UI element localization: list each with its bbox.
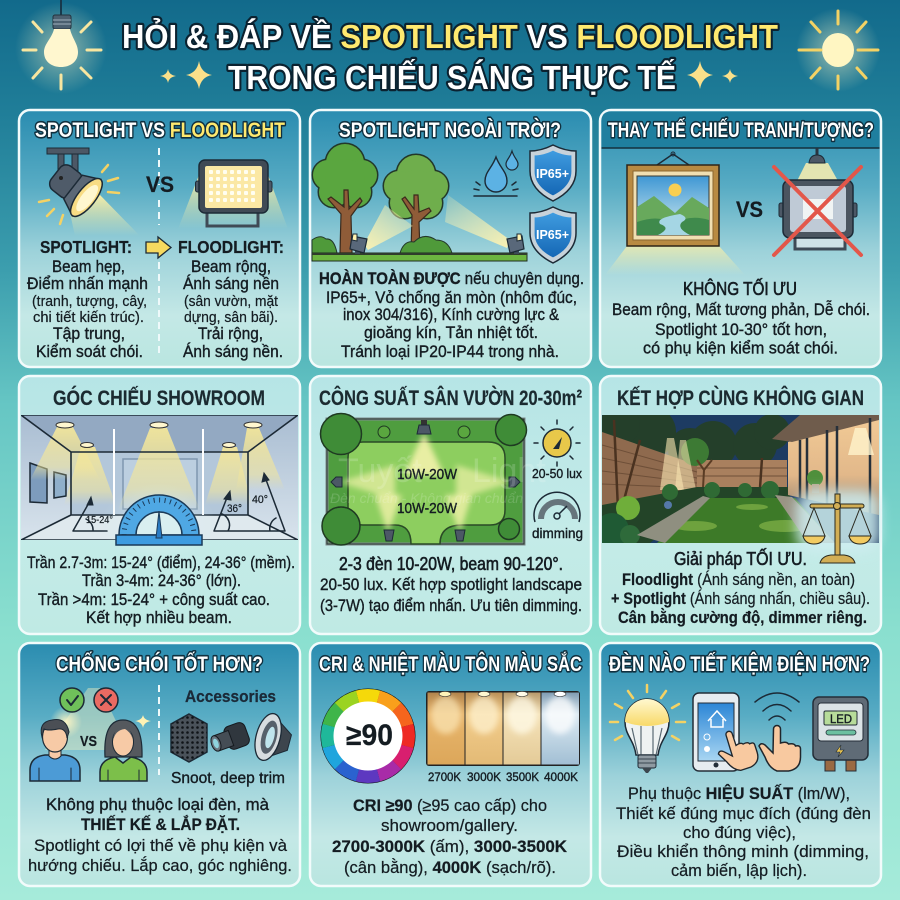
illustration: people and glare: VS [80,733,97,750]
icon: dimming gauge [532,492,583,541]
panel: spotlight vs floodlight [19,110,300,367]
spotlight text: SPOTLIGHT: [40,237,132,257]
icon: electric meter [813,697,868,771]
body text: Giải pháp TỐI ƯU. [674,548,807,569]
icon: shield bottom: IP65+ [536,227,569,242]
body text: Spotlight có lợi thế về phụ kiện và [34,837,288,855]
icon: framed picture [605,152,745,275]
panel: energy saving [600,643,881,886]
panel: garden wattage [310,376,591,634]
illustration: garden plan [320,414,526,545]
panel: outdoor spotlight [310,110,591,367]
body text: THIẾT KẾ & LẮP ĐẶT. [81,815,240,834]
watermark: Light [472,452,546,490]
heading: SPOTLIGHT NGOÀI TRỜI? [339,118,561,142]
header [15,0,880,96]
watermark [330,452,546,506]
floodlight text: Beam rộng, [191,258,271,276]
body text [319,269,584,361]
body text: (cân bằng), 4000K (sạch/rõ). [344,858,556,877]
vs label: VS [146,172,174,197]
floodlight text: dựng, sân bãi). [184,309,278,326]
floodlight text [178,237,284,361]
panel: replace for art lighting [600,110,881,367]
spotlight text: Kiểm soát chói. [36,343,143,361]
illustration: garden plan: 10W-20W [397,500,458,517]
body text: Floodlight (Ánh sáng nền, an toàn) [622,570,855,589]
angle arrows: 15-24° [86,514,113,526]
body text [28,796,292,875]
spotlight text: Beam hẹp, [52,258,125,276]
vs label: VS [736,197,763,222]
illustration: trees and ground lights [312,144,527,261]
heading: CHỐNG CHÓI TỐT HƠN? [56,652,263,676]
body text: + Spotlight (Ánh sáng nhấn, chiều sâu). [611,589,870,608]
icon: LED bulb [610,685,685,773]
panel: anti glare [19,643,300,886]
body text: Phụ thuộc HIỆU SUẤT (lm/W), [628,784,850,803]
angle arrows: 36° [227,503,242,515]
title line 1: HỎI & ĐÁP VỀ SPOTLIGHT VS FLOODLIGHT [122,18,778,55]
angle arrows [73,473,285,531]
chart: colour temperature swatches: 4000K [544,770,578,784]
body text: Thiết kế đúng mục đích (đúng đèn [616,805,871,823]
chart: colour wheel [311,679,425,793]
accessories: Snoot, deep trim [171,770,285,787]
body text: 2700-3000K (ấm), 3000-3500K [332,838,567,856]
spotlight text: chi tiết kiến trúc). [33,309,144,326]
heading: GÓC CHIẾU SHOWROOM [53,385,265,410]
floodlight text: FLOODLIGHT: [178,237,284,257]
floodlight text: Ánh sáng nền. [183,342,283,361]
body text [320,554,582,615]
panel: combine in one space [595,376,881,634]
icon: dimming gauge: dimming [532,526,583,541]
floodlight text: (sân vườn, mặt [184,293,279,310]
floodlight text: Ánh sáng nền [183,274,279,293]
body text: Không phụ thuộc loại đèn, mà [46,796,270,814]
body text: Điều khiển thông minh (dimming, [617,843,869,861]
body text: Trần >4m: 15-24° + công suất cao. [38,591,270,609]
spotlight text: Tập trung, [53,325,125,343]
body text: cho đúng việc), [683,824,796,842]
icon: honeycomb [171,714,207,762]
body text: cảm biến, lập lịch). [671,862,807,880]
icon: reflector [250,711,296,766]
chart: colour temperature swatches [426,691,580,784]
illustration: showroom [21,415,298,540]
body text: KHÔNG TỐI ƯU [683,278,797,299]
arrow [146,237,171,258]
panel: CRI and colour temperature [310,643,591,886]
body text: (3-7W) tạo điểm nhấn. Ưu tiên dimming. [320,597,582,615]
illustration: garden plan: 10W-20W [397,466,458,483]
body text: gioăng kín, Tản nhiệt tốt. [364,324,538,342]
body text: Cân bằng cường độ, dimmer riêng. [618,608,867,627]
icon: shield top: IP65+ [536,166,569,181]
heading: CRI & NHIỆT MÀU TÔN MÀU SẮC [319,652,582,676]
body text: Kết hợp nhiều beam. [86,609,232,627]
spotlight text: Điểm nhấn mạnh [27,275,148,293]
icon: lux meter [532,420,582,481]
body text [612,278,870,358]
icon: spotlight fixture [39,148,140,236]
divider [158,148,160,355]
body text: Spotlight 10-30° tốt hơn, [655,321,827,339]
body text: 2-3 đèn 10-20W, beam 90-120°. [339,554,563,574]
title line 2: TRONG CHIẾU SÁNG THỰC TẾ [228,59,676,96]
body text: IP65+, Vỏ chống ăn mòn (nhôm đúc, [326,289,577,307]
body text: 20-50 lux. Kết hợp spotlight landscape [320,576,582,594]
body text [616,784,871,880]
floodlight text: Trải rộng, [198,325,263,343]
body text: có phụ kiện kiểm soát chói. [643,340,838,358]
heading band [602,112,880,148]
heading: CÔNG SUẤT SÂN VƯỜN 20-30m² [319,385,582,410]
icon: shield top [530,145,576,201]
accessories [171,687,296,787]
icon: crossed floodlight [774,148,861,255]
body text [27,554,295,627]
body text: inox 304/316), Kính cường lực & [343,306,559,324]
body text: Tránh loại IP20-IP44 trong nhà. [341,343,559,361]
watermark: Đèn chuẩn - Không gian chuẩn [330,490,523,506]
spotlight text [27,237,148,361]
body text: HOÀN TOÀN ĐƯỢC nếu chuyên dụng. [319,269,584,288]
divider [158,685,160,775]
panel: showroom beam angle [19,376,300,634]
illustration: people and glare [30,688,151,781]
body text: Trần 3-4m: 24-36° (lớn). [82,572,241,590]
icon: shield bottom [530,207,576,263]
icon: protractor [101,483,217,567]
body text: showroom/gallery. [381,817,518,835]
chart: colour temperature swatches: 3500K [506,770,539,784]
heading: SPOTLIGHT VS FLOODLIGHT [35,119,285,142]
icon: bulb left [15,0,107,94]
illustration: garden house at night [602,415,879,543]
body text: Trần 2.7-3m: 15-24° (điểm), 24-36° (mềm). [27,554,295,572]
icon: electric meter: LED [830,714,852,726]
body text: CRI ≥90 (≥95 cao cấp) cho [353,797,547,815]
body text: hướng chiếu. Lắp cao, góc nghiêng. [28,856,292,875]
chart: colour temperature swatches: 2700K [428,770,461,784]
body text [611,548,870,627]
spotlight text: (tranh, tượng, cây, [32,293,147,310]
icon: floodlight [178,160,288,229]
chart: colour wheel: ≥90 [346,719,393,752]
accessories: Accessories [185,687,276,706]
icon: water drops [474,151,518,196]
icon: lux meter: 20-50 lux [532,466,582,481]
watermark: Tuyết [338,452,422,490]
icon: balance scale [796,490,880,563]
body text [332,797,567,877]
angle arrows: 40° [252,494,268,506]
sparkles [160,61,738,89]
icon: touch and wifi [755,693,800,771]
icon: snoot [208,721,251,756]
icon: smartphone [693,693,761,775]
body text: Beam rộng, Mất tương phản, Dễ chói. [612,300,870,319]
chart: colour temperature swatches: 3000K [467,770,501,784]
icon: sun right [796,8,880,92]
